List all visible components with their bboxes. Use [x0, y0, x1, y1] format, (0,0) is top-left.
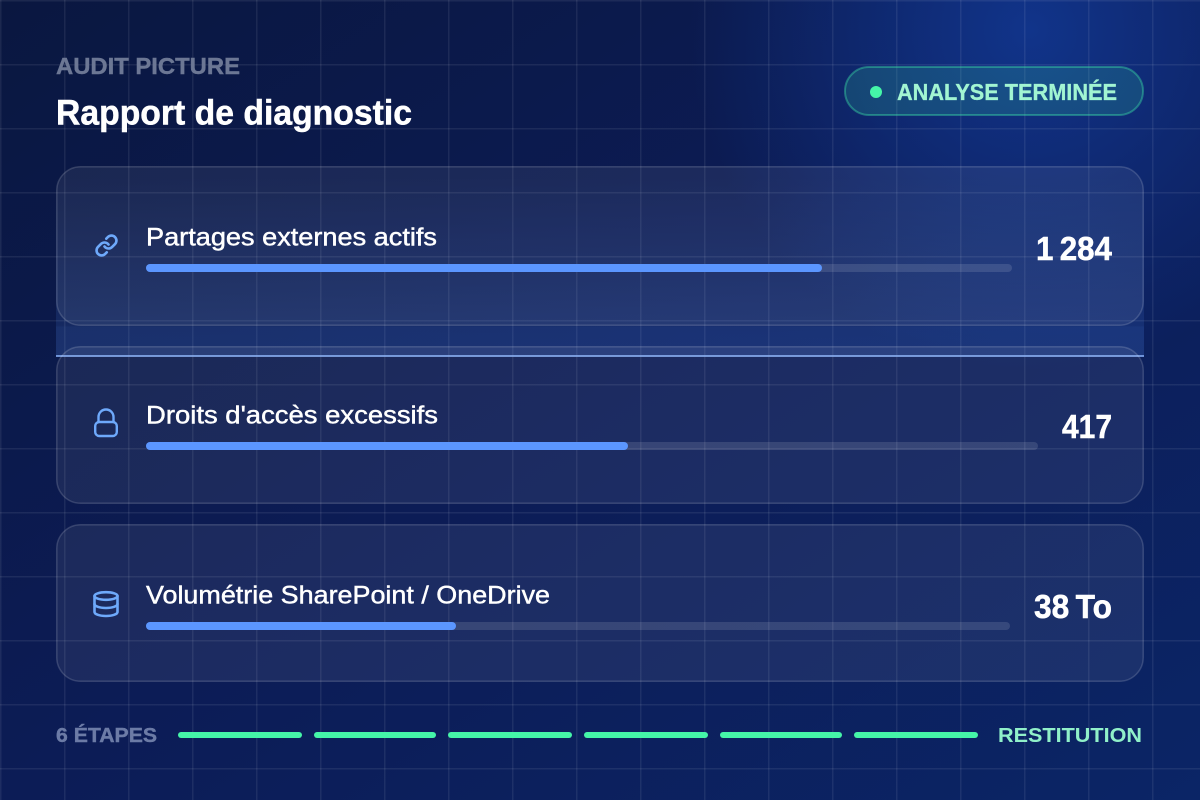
status text: ANALYSE TERMINÉE	[897, 78, 1117, 105]
panel: storage volume	[57, 525, 1143, 681]
panel: excessive rights	[57, 347, 1143, 503]
label: Droits d'accès excessifs	[146, 402, 438, 430]
progress bar	[146, 442, 1038, 450]
progress bar	[146, 622, 1010, 630]
icon: lock	[95, 410, 117, 436]
panel: external shares	[57, 167, 1143, 325]
value: 1 284	[1036, 230, 1113, 267]
icon: link	[97, 236, 116, 255]
icon: database	[94, 592, 118, 616]
progress bar	[146, 264, 1012, 272]
step progress segments	[178, 732, 978, 738]
status badge	[845, 67, 1143, 115]
footer label: restitution: RESTITUTION	[998, 725, 1142, 747]
header eyebrow: AUDIT PICTURE: AUDIT PICTURE	[56, 53, 240, 79]
status dot	[870, 86, 882, 98]
title: Rapport de diagnostic	[56, 94, 412, 132]
value: 417	[1062, 408, 1112, 445]
footer label: 6 étapes: 6 ÉTAPES	[56, 724, 157, 747]
label: Volumétrie SharePoint / OneDrive	[146, 582, 550, 610]
label: Partages externes actifs	[146, 224, 437, 252]
value: 38 To	[1034, 588, 1112, 625]
scan band	[56, 176, 1144, 357]
